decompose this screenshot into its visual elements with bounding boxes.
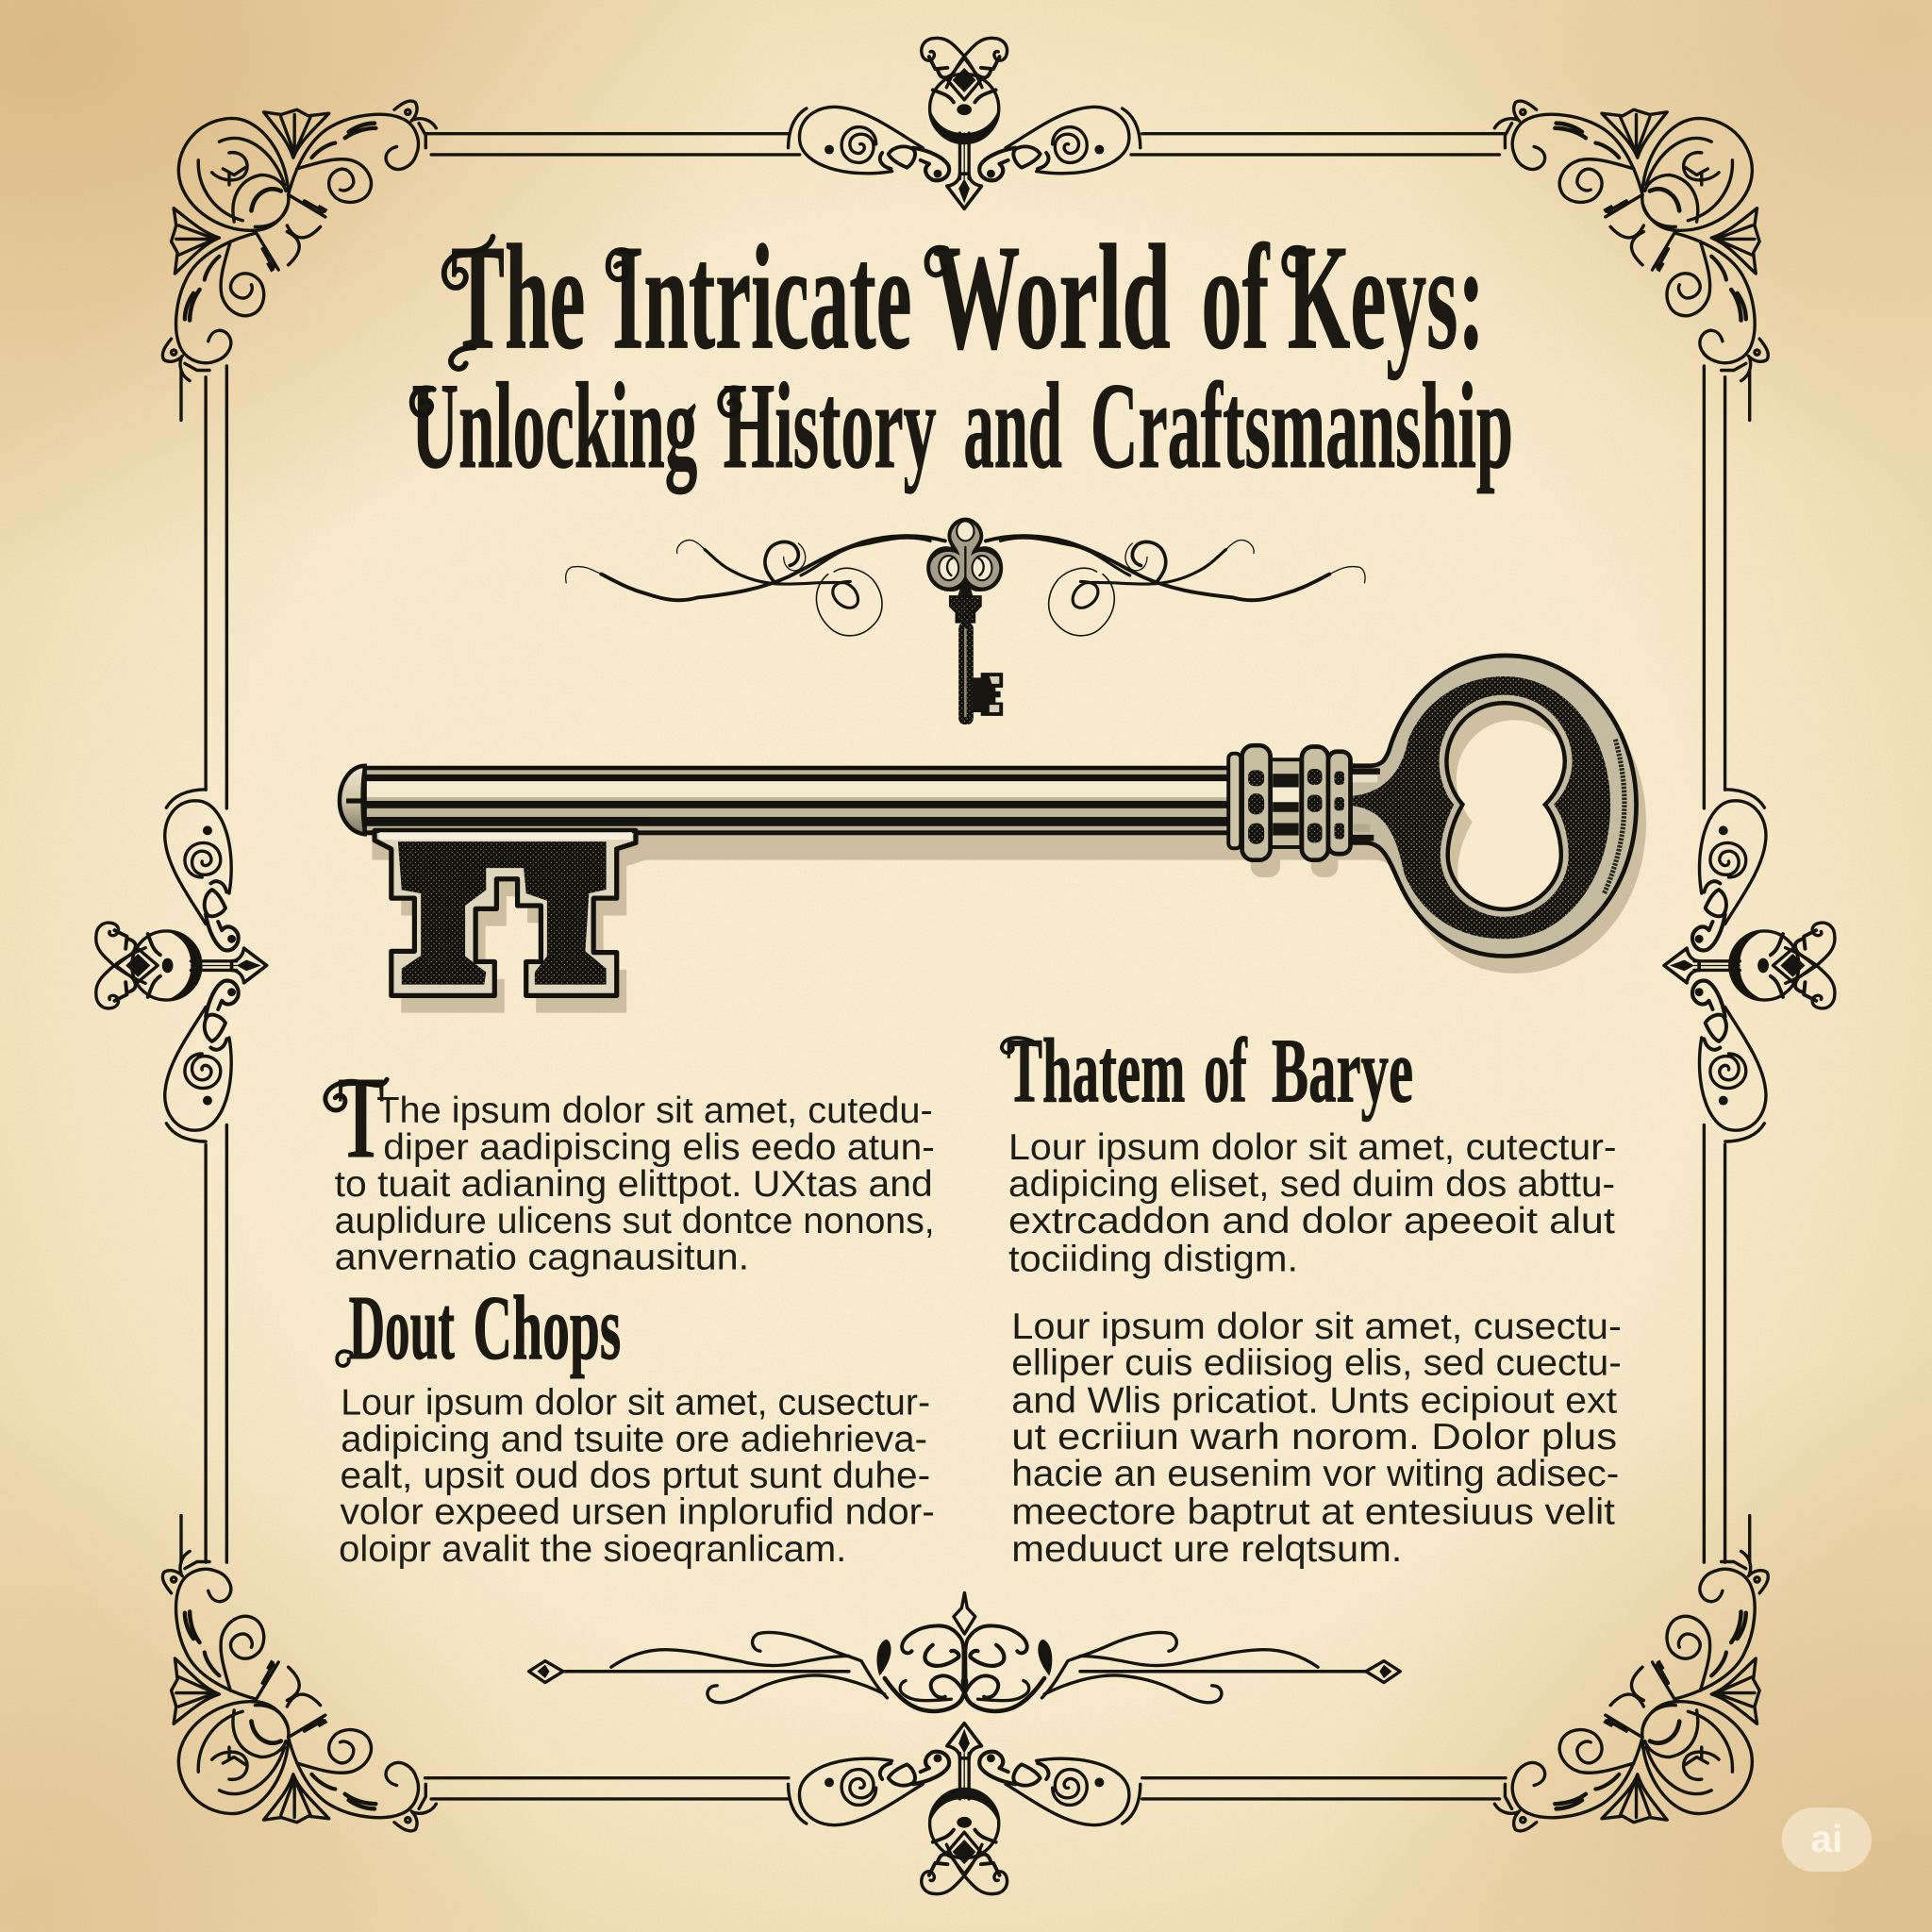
divider left half xyxy=(529,1625,966,1711)
text block: right column first paragraph: adipicing eliset, sed duim dos abttu- xyxy=(1008,1164,1615,1205)
text block: right column second paragraph: meduuct ure relqtsum. xyxy=(1011,1529,1402,1570)
title swashes xyxy=(412,237,1304,415)
divider right half xyxy=(963,1625,1400,1711)
text block: left column intro: auplidure ulicens sut dontce nonons, xyxy=(335,1201,935,1241)
drop cap T: T xyxy=(338,1052,385,1183)
text block: right column first paragraph xyxy=(1008,1127,1617,1280)
corner ornament: bottom left xyxy=(162,1551,436,1831)
text block: right column second paragraph xyxy=(1011,1307,1622,1570)
title line 1: of xyxy=(1201,214,1270,380)
text block: right column second paragraph: meectore baptrut at entesiuus velit xyxy=(1011,1492,1615,1533)
title line 1: World xyxy=(933,214,1171,380)
title line 1: The xyxy=(451,214,585,380)
title line 2 xyxy=(411,358,1513,494)
heading: Thatem of Barye: Thatem xyxy=(1007,1021,1185,1123)
key bow xyxy=(1351,656,1637,957)
key shaft xyxy=(340,766,1230,835)
text block: right column second paragraph: ut ecriiun warh norom. Dolor plus xyxy=(1011,1417,1617,1457)
title line 1: Intricate xyxy=(612,214,912,380)
title line 2: Craftsmanship xyxy=(1091,358,1513,494)
title line 2: Unlocking xyxy=(411,358,697,494)
heading: Dout Chops xyxy=(337,1277,621,1379)
title line 2: History xyxy=(724,358,937,494)
text block: right column first paragraph: tociiding distigm. xyxy=(1008,1240,1298,1280)
ornamental divider with small key xyxy=(566,518,1365,724)
side ornament: left xyxy=(96,790,267,1141)
text block: right column second paragraph: hacie an eusenim vor witing adisec- xyxy=(1011,1454,1619,1494)
title line 1 xyxy=(451,214,1485,380)
text block: left column intro xyxy=(325,1052,935,1277)
key bit xyxy=(375,830,636,995)
text block: left column body: oloipr avalit the sioeqranlicam. xyxy=(339,1529,846,1570)
title line 2: and xyxy=(963,358,1062,494)
bottom ornamental divider xyxy=(529,1592,1400,1711)
icon: small key xyxy=(926,518,1003,724)
text block: left column body: Lour ipsum dolor sit amet, cusectur- xyxy=(341,1382,930,1423)
text block: right column first paragraph: extrcaddon and dolor apeeoit alut xyxy=(1008,1201,1615,1241)
watermark: ai badge xyxy=(1782,1807,1872,1872)
text block: left column body xyxy=(339,1382,935,1570)
text block: right column first paragraph: Lour ipsum dolor sit amet, cutectur- xyxy=(1008,1127,1617,1168)
title line 1: Keys: xyxy=(1288,214,1485,380)
heading: Thatem of Barye: Barye xyxy=(1272,1021,1413,1123)
text block: left column intro: diper aadipiscing elis eedo atun- xyxy=(383,1127,935,1168)
corner ornament: top right xyxy=(1494,101,1768,381)
key shadow xyxy=(372,673,1646,1013)
heading: Dout Chops: Chops xyxy=(474,1277,621,1379)
heading: Thatem of Barye: of xyxy=(1204,1021,1248,1123)
text block: left column body: adipicing and tsuite ore adiehrieva- xyxy=(341,1420,927,1460)
text block: right column second paragraph: elliper cuis ediisiog elis, sed cuectu- xyxy=(1011,1343,1622,1384)
text block: left column body: ealt, upsit oud dos prtut sunt duhe- xyxy=(340,1456,930,1496)
heading: Dout Chops: Dout xyxy=(349,1277,455,1379)
bottom ornament xyxy=(789,1724,1141,1894)
corner ornament: top left xyxy=(162,101,436,381)
divider top diamond xyxy=(954,1592,975,1634)
key collar rings xyxy=(1228,745,1351,860)
large key illustration xyxy=(340,656,1646,1013)
frame rules xyxy=(181,134,1750,1799)
text block: left column intro: anvernatio cagnausitun. xyxy=(335,1237,749,1277)
side ornament: right xyxy=(1664,790,1835,1141)
text block: right column second paragraph: and Wlis pricatiot. Unts ecipiout ext xyxy=(1011,1381,1617,1422)
drop cap T xyxy=(325,1052,387,1183)
top ornament xyxy=(789,38,1141,208)
text block: left column intro: The ipsum dolor sit amet, cutedu- xyxy=(376,1091,933,1131)
text block: right column second paragraph: Lour ipsum dolor sit amet, cusectu- xyxy=(1011,1307,1622,1347)
flourish right xyxy=(986,536,1365,636)
flourish left xyxy=(566,536,945,636)
text block: left column intro: to tuait adianing elittpot. UXtas and xyxy=(335,1164,933,1205)
text block: left column body: volor expeed ursen inplorufid ndor- xyxy=(340,1492,935,1533)
watermark: ai badge: ai xyxy=(1810,1817,1842,1860)
title xyxy=(411,214,1513,494)
corner ornament: bottom right xyxy=(1494,1551,1768,1831)
